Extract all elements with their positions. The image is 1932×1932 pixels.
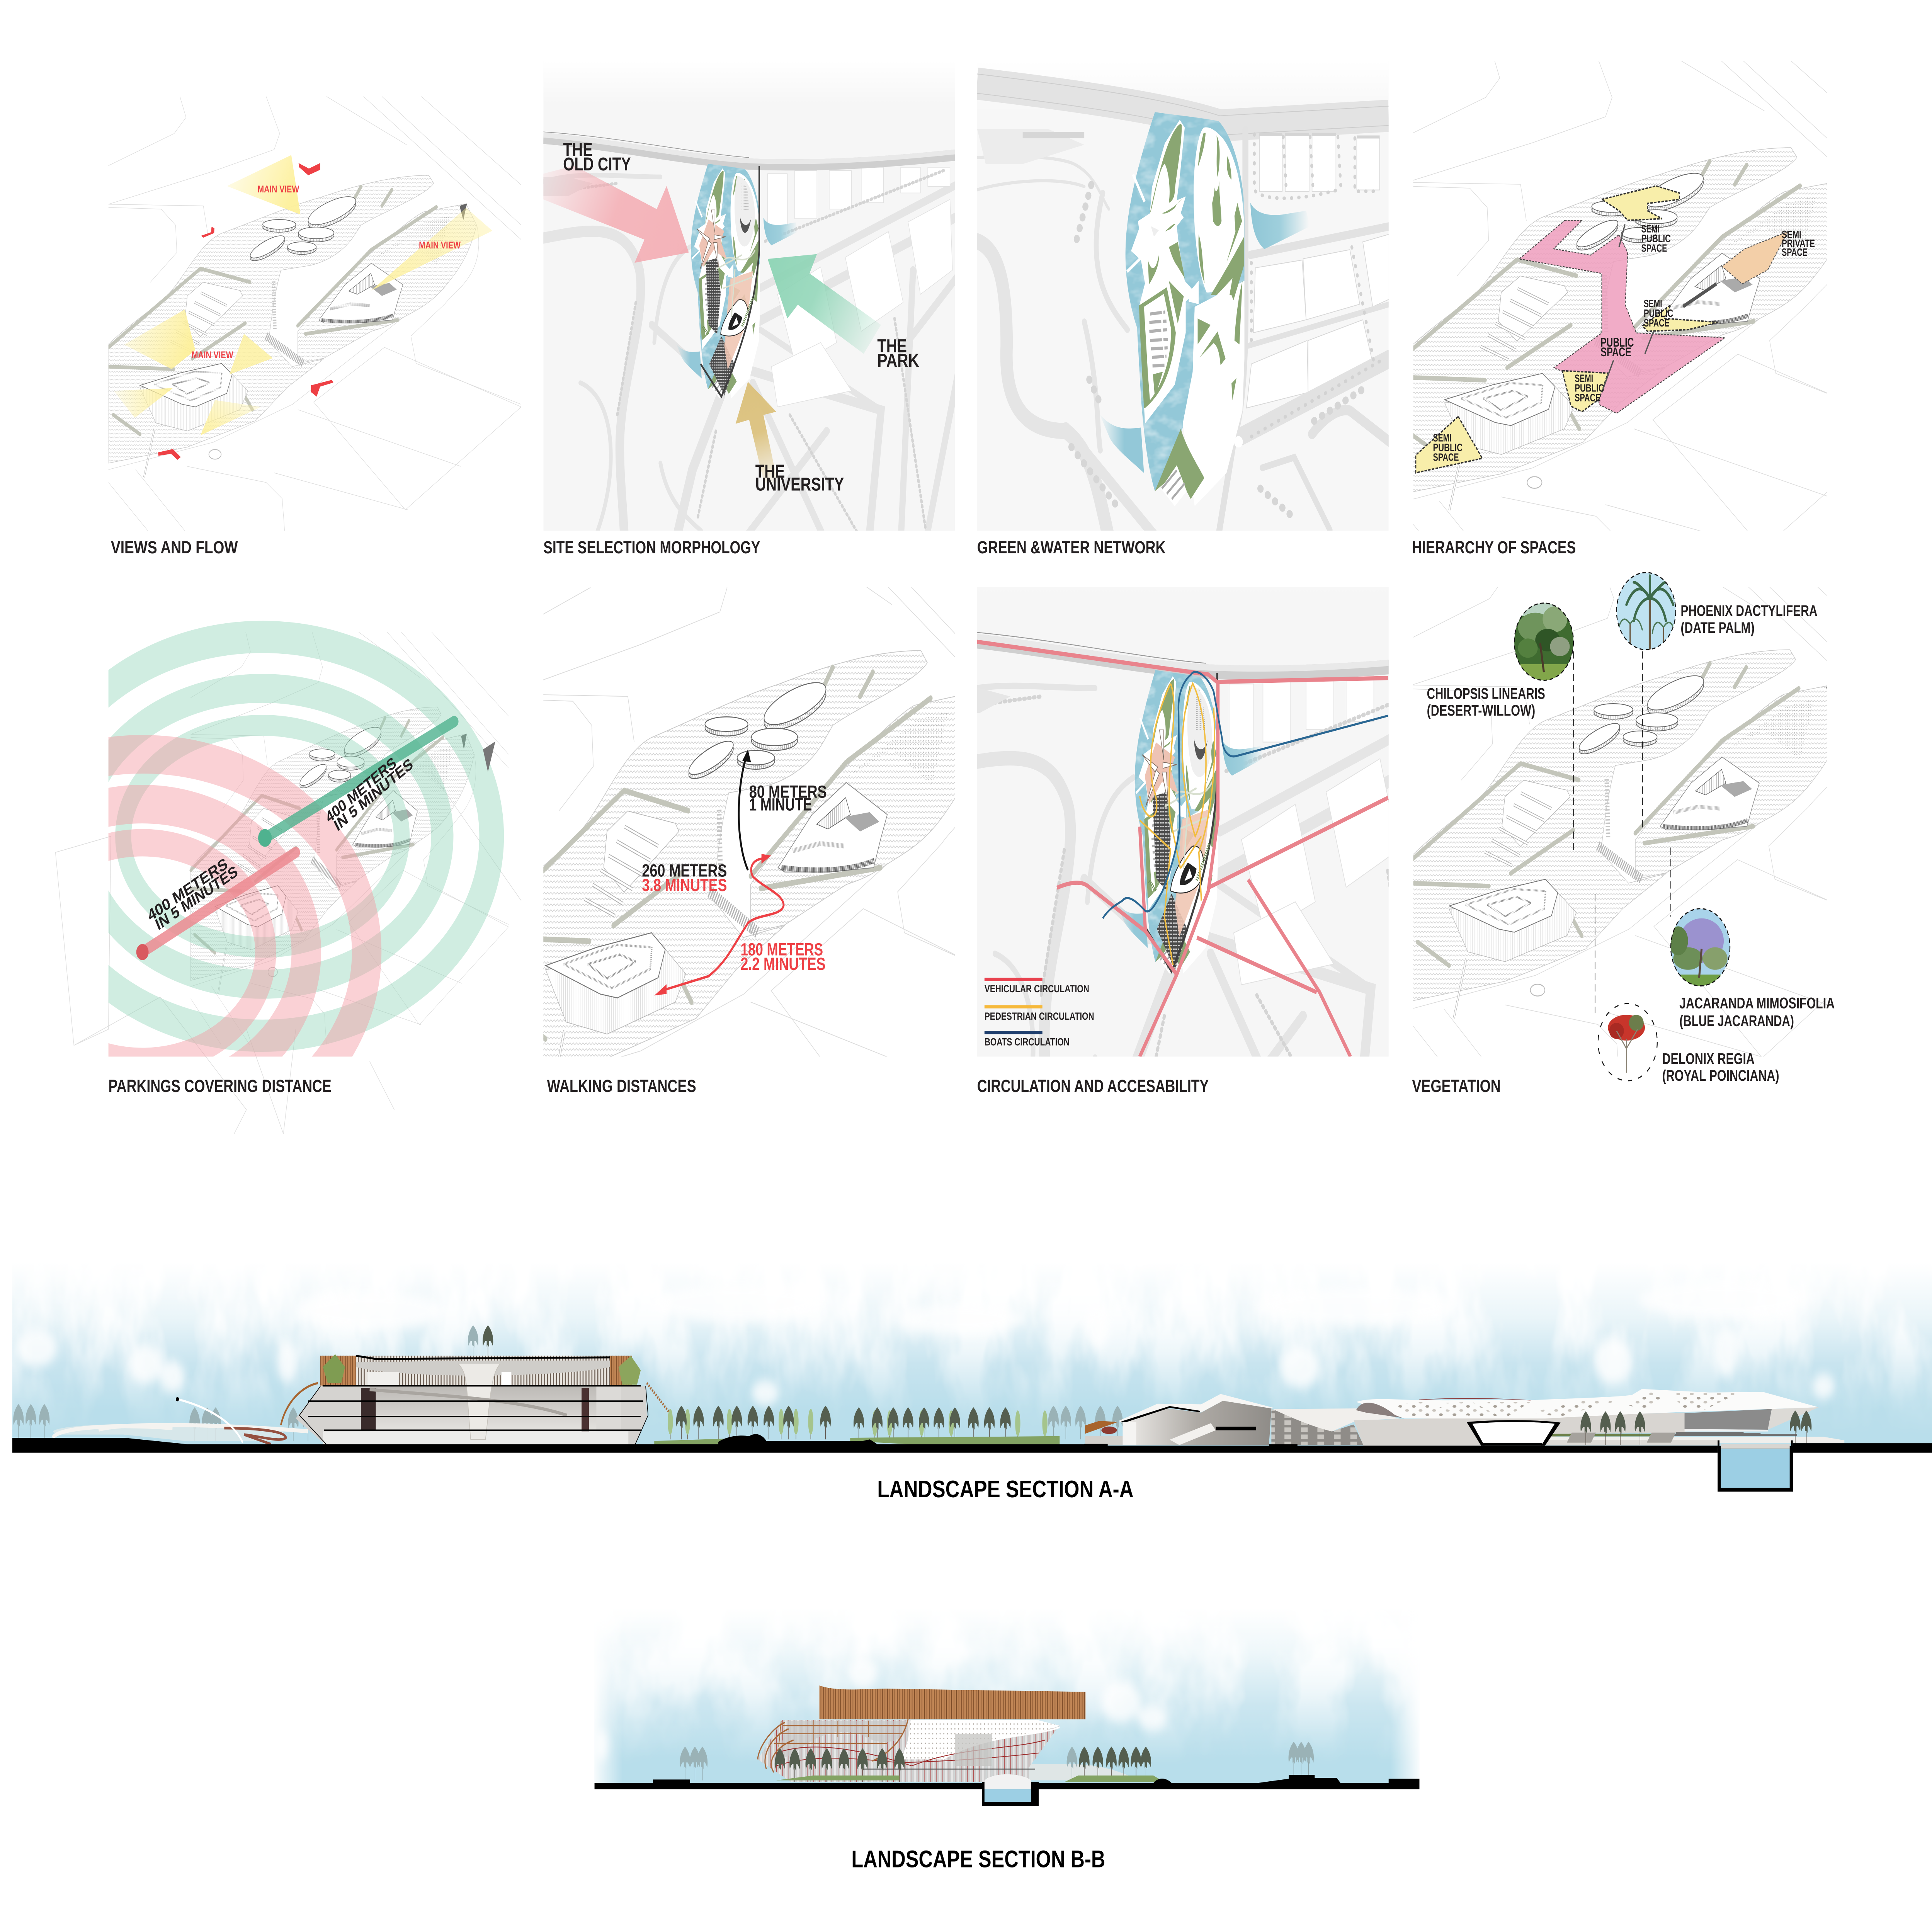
label: jacaranda mimosifolia: JACARANDA MIMOSIFOLIA [1679, 995, 1835, 1012]
heading: site selection morphology: SITE SELECTION MORPHOLOGY [543, 537, 760, 557]
label: 180 meters: 180 METERS [740, 939, 823, 959]
label: 180 meters: 2.2 MINUTES [740, 954, 825, 974]
label: chilopsis linearis: CHILOPSIS LINEARIS [1427, 685, 1545, 702]
yellow view cones [114, 155, 492, 435]
label: jacaranda mimosifolia: (BLUE JACARANDA) [1679, 1013, 1794, 1029]
water and green network plan [1099, 112, 1310, 506]
heading: parkings covering distance: PARKINGS COVERING DISTANCE [109, 1076, 332, 1096]
space labels [1433, 223, 1815, 463]
space labels: SPACE [1600, 345, 1631, 359]
heading: landscape section B-B: LANDSCAPE SECTION B-B [851, 1845, 1105, 1872]
space labels: SEMI [1644, 298, 1662, 310]
label: 400 meters left: 400 METERS [145, 854, 230, 925]
heading: views and flow: VIEWS AND FLOW [111, 537, 238, 557]
space labels: PUBLIC [1575, 383, 1604, 394]
canal basin [982, 1774, 1039, 1806]
building body [758, 1720, 1060, 1782]
leader dashes [1573, 651, 1671, 1013]
legend: BOATS CIRCULATION [985, 1036, 1070, 1048]
ground line [12, 1434, 1932, 1453]
label: delonix regia: (ROYAL POINCIANA) [1662, 1067, 1779, 1084]
lawns [654, 1436, 1060, 1444]
landscape section A-A [12, 1254, 1932, 1502]
label: the park: PARK [877, 350, 919, 371]
palm above building [468, 1325, 493, 1359]
arrow: 80 meters black route [739, 750, 751, 870]
palms near right building [1580, 1410, 1811, 1445]
label: 260 meters: 260 METERS [642, 861, 727, 880]
arrow: old city [543, 166, 689, 263]
icon: blue jacaranda photo [1668, 909, 1730, 986]
label: the old city: OLD CITY [563, 154, 631, 175]
sky [595, 1604, 1419, 1784]
semi private zone [1722, 231, 1788, 284]
label: the university: THE [755, 461, 785, 482]
space labels: PUBLIC [1433, 442, 1463, 454]
semi public zones [1416, 186, 1719, 473]
panel: views and flow [109, 97, 521, 557]
section building left [281, 1354, 672, 1446]
panel: parkings covering distance [0, 632, 521, 1150]
palm and poplar rows [668, 1406, 1123, 1441]
public space pink zone [1519, 220, 1725, 413]
label: phoenix dactylifera: PHOENIX DACTYLIFERA [1680, 602, 1817, 619]
heading: walking distances: WALKING DISTANCES [547, 1076, 696, 1096]
far palms left [13, 1404, 313, 1441]
panel: vegetation [1412, 554, 1899, 1096]
space labels: SPACE [1433, 452, 1459, 463]
panel: walking distances [504, 532, 1041, 1184]
boats circulation line [1103, 672, 1388, 918]
far palms [680, 1742, 1314, 1781]
heading: hierarchy of spaces: HIERARCHY OF SPACES [1412, 537, 1576, 557]
label: 400 meters right: 400 METERS [323, 753, 399, 827]
coverage rings [0, 637, 492, 1150]
space labels: SEMI [1433, 432, 1451, 444]
base map roads [977, 61, 1389, 539]
label: 80 meters: 80 METERS [749, 782, 827, 802]
panel: green and water network [977, 61, 1389, 557]
red entry chevrons [158, 163, 333, 460]
legend: PEDESTRIAN CIRCULATION [985, 1010, 1094, 1022]
icon: date palm photo [1617, 573, 1676, 650]
heading: circulation and accesability: CIRCULATION AND ACCESABILITY [977, 1076, 1209, 1096]
panel: hierarchy of spaces [1406, 53, 1902, 574]
space labels: SPACE [1782, 247, 1808, 259]
icon: desert willow photo [1514, 603, 1573, 680]
heading: landscape section A-A: LANDSCAPE SECTION A-A [877, 1476, 1134, 1502]
heading: vegetation: VEGETATION [1412, 1076, 1501, 1096]
label: chilopsis linearis: (DESERT-WILLOW) [1427, 702, 1535, 719]
red walking route [136, 852, 296, 960]
landscape section B-B [595, 1604, 1419, 1872]
main view label right: MAIN VIEW [419, 240, 461, 251]
legend [985, 978, 1094, 1048]
space labels: SPACE [1644, 317, 1670, 329]
bridge behind [1029, 1764, 1140, 1781]
panel: site selection morphology [543, 100, 955, 553]
arrow: red S route [654, 854, 784, 995]
space labels: PUBLIC [1641, 233, 1671, 245]
pavilion ramp [53, 1397, 308, 1444]
label: 80 meters: 1 MINUTE [749, 794, 812, 815]
arrow: park [768, 254, 881, 354]
label: the park: THE [877, 336, 907, 357]
space labels: PRIVATE [1782, 238, 1815, 250]
panel: circulation and accessibility [949, 539, 1473, 1161]
space labels: SEMI [1575, 373, 1593, 384]
ground line [595, 1775, 1419, 1789]
label: the university: UNIVERSITY [755, 474, 844, 495]
main view label top: MAIN VIEW [257, 184, 299, 194]
sky [12, 1254, 1932, 1447]
legend: VEHICULAR CIRCULATION [985, 983, 1089, 995]
label: the old city: THE [563, 139, 593, 160]
label: phoenix dactylifera: (DATE PALM) [1680, 619, 1755, 636]
icon: royal poinciana tree [1598, 1003, 1657, 1081]
label: 400 meters left: IN 5 MINUTES [153, 862, 240, 934]
space labels: PUBLIC [1644, 308, 1673, 320]
space labels: SPACE [1641, 243, 1667, 254]
arrow: university [736, 382, 777, 483]
label: delonix regia: DELONIX REGIA [1662, 1050, 1755, 1067]
timber ribs [758, 1719, 908, 1772]
lawn [776, 1776, 1164, 1782]
main view label left: MAIN VIEW [192, 349, 233, 361]
wooden slat volume [820, 1685, 1085, 1719]
grey building tip [483, 742, 495, 772]
palms in front [775, 1747, 1151, 1782]
canal basin [1718, 1440, 1793, 1492]
section building right [1085, 1389, 1844, 1446]
heading: green and water network: GREEN &WATER NETWORK [977, 537, 1166, 557]
label: 400 meters right: IN 5 MINUTES [331, 754, 415, 835]
space labels: SPACE [1575, 392, 1600, 404]
flow arrows [1602, 224, 1716, 393]
space labels: PUBLIC [1600, 336, 1634, 350]
green walking route [258, 721, 454, 847]
space labels: SEMI [1641, 223, 1660, 235]
vehicular circulation lines [976, 642, 1388, 1057]
label: 260 meters: 3.8 MINUTES [642, 875, 727, 895]
pedestrian circulation lines [1140, 684, 1214, 965]
space labels: SEMI [1782, 229, 1801, 241]
